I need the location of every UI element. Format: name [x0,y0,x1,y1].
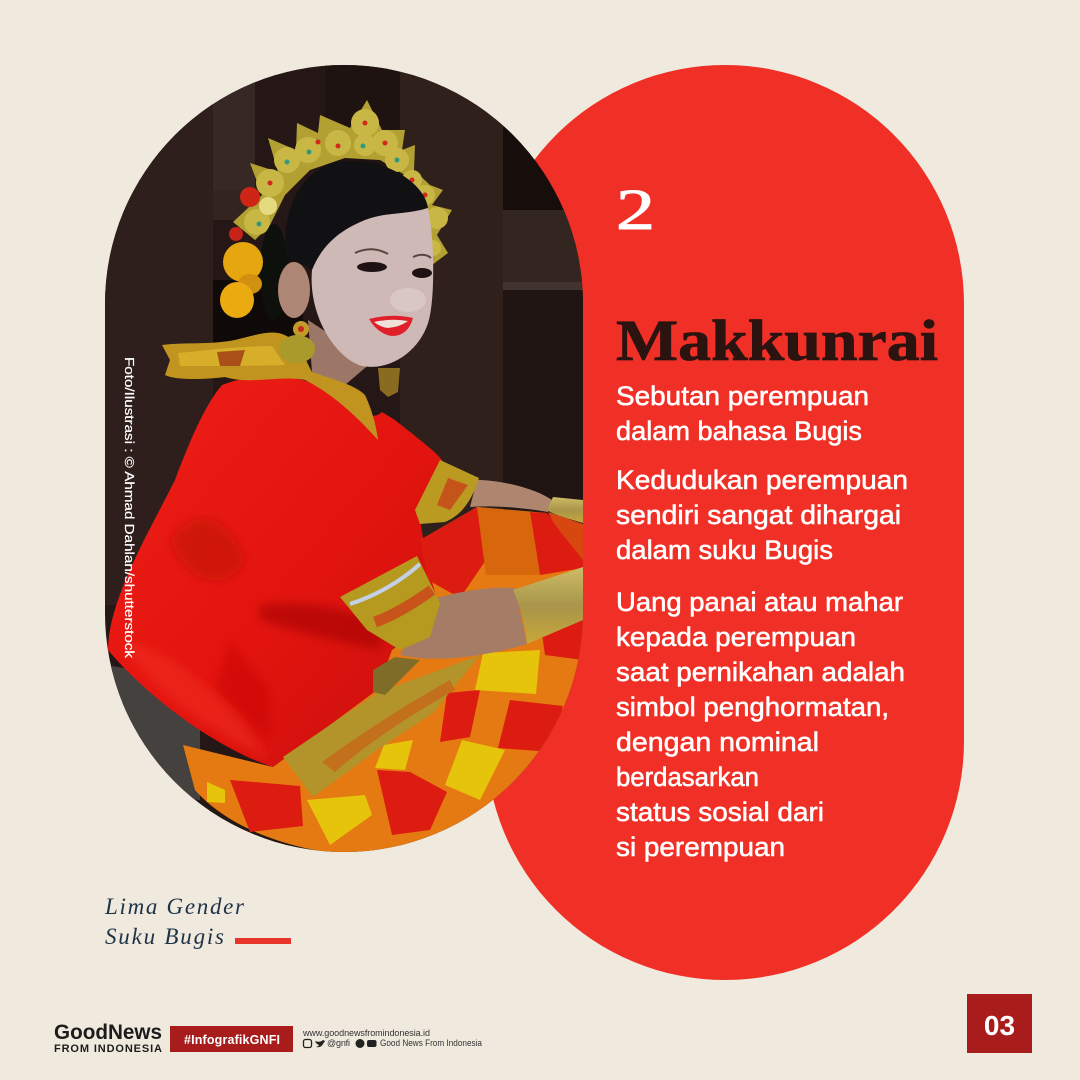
arms [400,480,552,659]
text block: paragraph 2 [616,465,908,565]
skirt [183,507,583,856]
eyes and mouth [355,249,432,336]
text block: paragraph 1: dalam bahasa Bugis [616,416,862,446]
icon: facebook [356,1039,364,1048]
number 2: 2 [616,177,655,242]
series label [104,894,245,949]
text block: paragraph 3: status sosial dari [616,797,824,827]
photo credit: Foto/Ilustrasi : © Ahmad Dahlan/shutterstock [122,357,137,659]
panel: photo of woman in Bugis dress [105,65,583,856]
text block: paragraph 1 [616,381,869,446]
title: Makkunrai [616,308,938,373]
face [312,208,433,367]
website and social handles [302,1028,482,1048]
page number badge [967,994,1032,1053]
gold sash [283,655,480,797]
text block: paragraph 3: simbol penghormatan, [616,692,889,722]
dress [108,376,443,767]
text block: paragraph 3: kepada perempuan [616,622,856,652]
website and social handles: @gnfi [327,1038,350,1048]
text block: paragraph 2: dalam suku Bugis [616,535,833,565]
gold cuffs [513,497,583,644]
gold collar [162,333,378,440]
icon: flowers [220,187,288,320]
neck [308,320,372,385]
series label: Suku Bugis [105,924,224,949]
website and social handles: www.goodnewsfromindonesia.id [302,1028,430,1038]
text block: paragraph 3: si perempuan [616,832,785,862]
text block: paragraph 1: Sebutan perempuan [616,381,869,411]
text block: paragraph 2: Kedudukan perempuan [616,465,908,495]
hashtag badge [170,1026,293,1052]
text block: paragraph 3: berdasarkan [616,762,759,792]
series label: Lima Gender [104,894,245,919]
icon: gold crown [233,100,452,265]
dress shading [120,518,385,760]
icon: youtube [367,1040,376,1047]
logo: GoodNews [54,1021,162,1055]
hashtag badge: #InfografikGNFI [184,1033,280,1047]
page number badge: 03 [984,1010,1015,1041]
logo: GoodNews: FROM INDONESIA [54,1043,162,1055]
ear [278,262,310,318]
logo: GoodNews: GoodNews [54,1021,162,1044]
sleeve trims [340,460,479,650]
text block: paragraph 3 [616,587,905,862]
icon: twitter [315,1040,325,1047]
panel: red pill [486,65,964,980]
red accent bar [235,938,291,944]
text block: paragraph 3: Uang panai atau mahar [616,587,903,617]
icon: earrings [293,321,400,397]
icon: instagram [304,1040,312,1048]
hair [285,161,428,270]
website and social handles: Good News From Indonesia [380,1038,482,1048]
text block: paragraph 3: saat pernikahan adalah [616,657,905,687]
text block: paragraph 2: sendiri sangat dihargai [616,500,901,530]
text block: paragraph 3: dengan nominal [616,727,819,757]
